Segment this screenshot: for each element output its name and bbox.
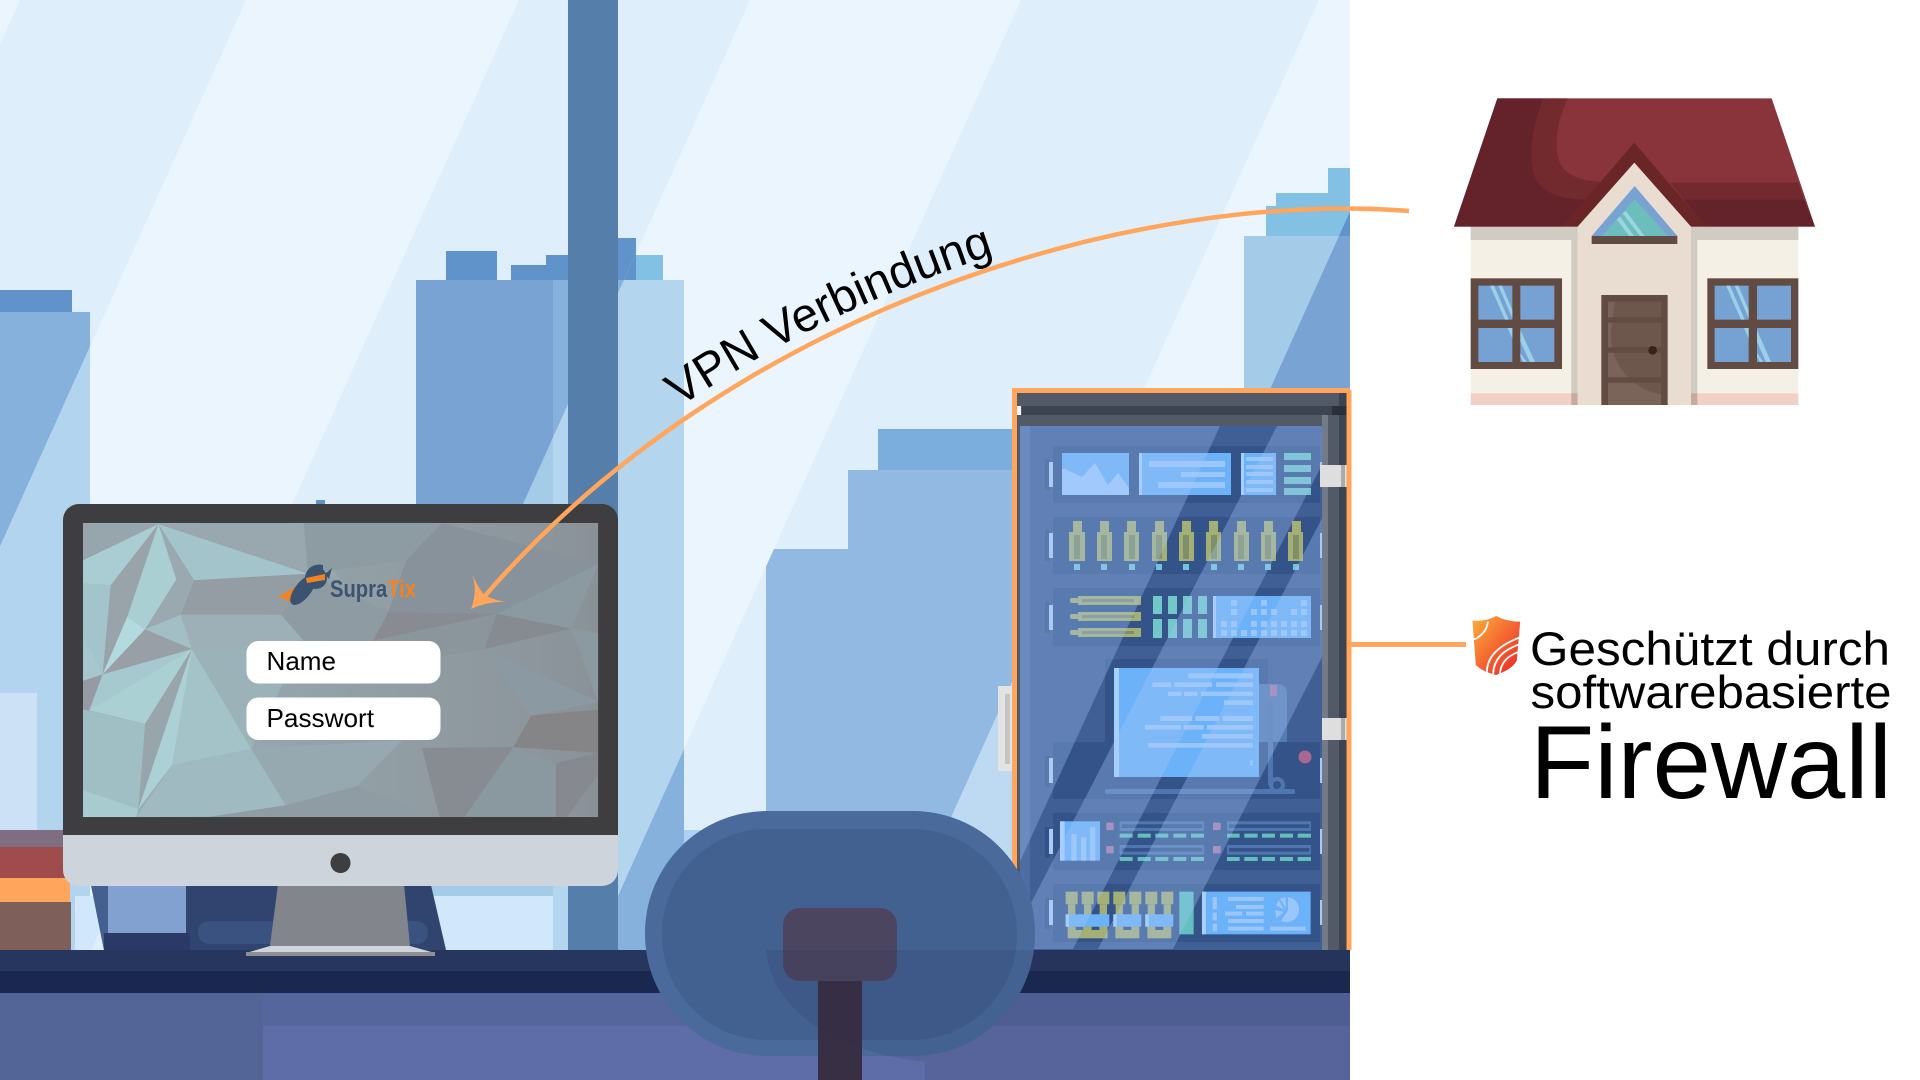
text: firewall caption: [1530, 622, 1892, 821]
chair back outer: [645, 811, 1035, 1056]
house roof: [1454, 98, 1815, 227]
chair back inner: [662, 829, 1017, 1040]
left window: [1471, 278, 1562, 369]
rack body: [1020, 426, 1322, 950]
pillar: [568, 0, 618, 950]
computer monitor: [63, 504, 618, 956]
arrow: VPN connection arc: [471, 209, 1409, 609]
rack door hinge: [998, 686, 1014, 771]
rack row 4 terminal screen: [1105, 668, 1312, 794]
rack row 2 fuses: [1069, 521, 1303, 570]
password field: [246, 698, 440, 740]
camera dot: [330, 853, 350, 873]
password field: Passwort: [266, 703, 375, 733]
label: VPN Verbindung: VPN Verbindung: [662, 232, 992, 400]
chair: [645, 811, 1035, 1080]
house walls: [1471, 227, 1798, 405]
monitor chin: [63, 830, 618, 886]
chair joint: [783, 908, 897, 981]
logo wordmark: SupraTix: [330, 576, 417, 603]
rack contents: [1020, 426, 1322, 949]
rack latches: [1320, 465, 1348, 740]
text: firewall caption: Firewall: [1530, 705, 1892, 821]
rack row 5 chart and status: [1060, 821, 1311, 861]
rack tabs: [1045, 459, 1323, 929]
text: firewall caption: softwarebasierte: [1530, 666, 1892, 718]
rack row 1 screens: [1062, 453, 1311, 495]
background monitor behind the computer: [91, 885, 446, 950]
icon: firewall shield: [1472, 616, 1520, 675]
desk shadow: [766, 950, 1350, 1080]
gable window: [1592, 186, 1677, 244]
house door: [1601, 295, 1668, 405]
name field: Name: [266, 646, 336, 676]
logo: SupraTix: [278, 565, 417, 609]
rack row backgrounds: [1053, 446, 1320, 942]
name field: [246, 641, 440, 684]
rack frame: [1017, 393, 1348, 950]
logo ninja mascot: [278, 565, 332, 609]
right window: [1707, 278, 1798, 369]
server rack: [998, 388, 1352, 950]
rack orange outline: [1014, 390, 1350, 950]
connector line to firewall: [1350, 642, 1466, 647]
window and buildings, shaded: [0, 0, 1350, 950]
house front gable: [1578, 163, 1691, 405]
window and buildings, light streaks: [0, 0, 1350, 950]
books on desk: [0, 830, 71, 950]
rack glass reflections: [1020, 426, 1322, 949]
monitor bezel: [63, 504, 618, 835]
icon: house: [1454, 98, 1815, 405]
rack row 6 plugs and pie panel: [1066, 892, 1311, 938]
rack row 3 connectors and grid: [1070, 596, 1311, 638]
panel: city background: [0, 0, 1350, 950]
text: firewall caption: Geschützt durch: [1530, 622, 1890, 675]
chair post: [818, 981, 862, 1080]
login screen low-poly wallpaper: [83, 523, 598, 817]
monitor stand: [246, 884, 435, 956]
desk and floor: [0, 950, 1350, 1080]
arrowhead: [471, 574, 506, 609]
